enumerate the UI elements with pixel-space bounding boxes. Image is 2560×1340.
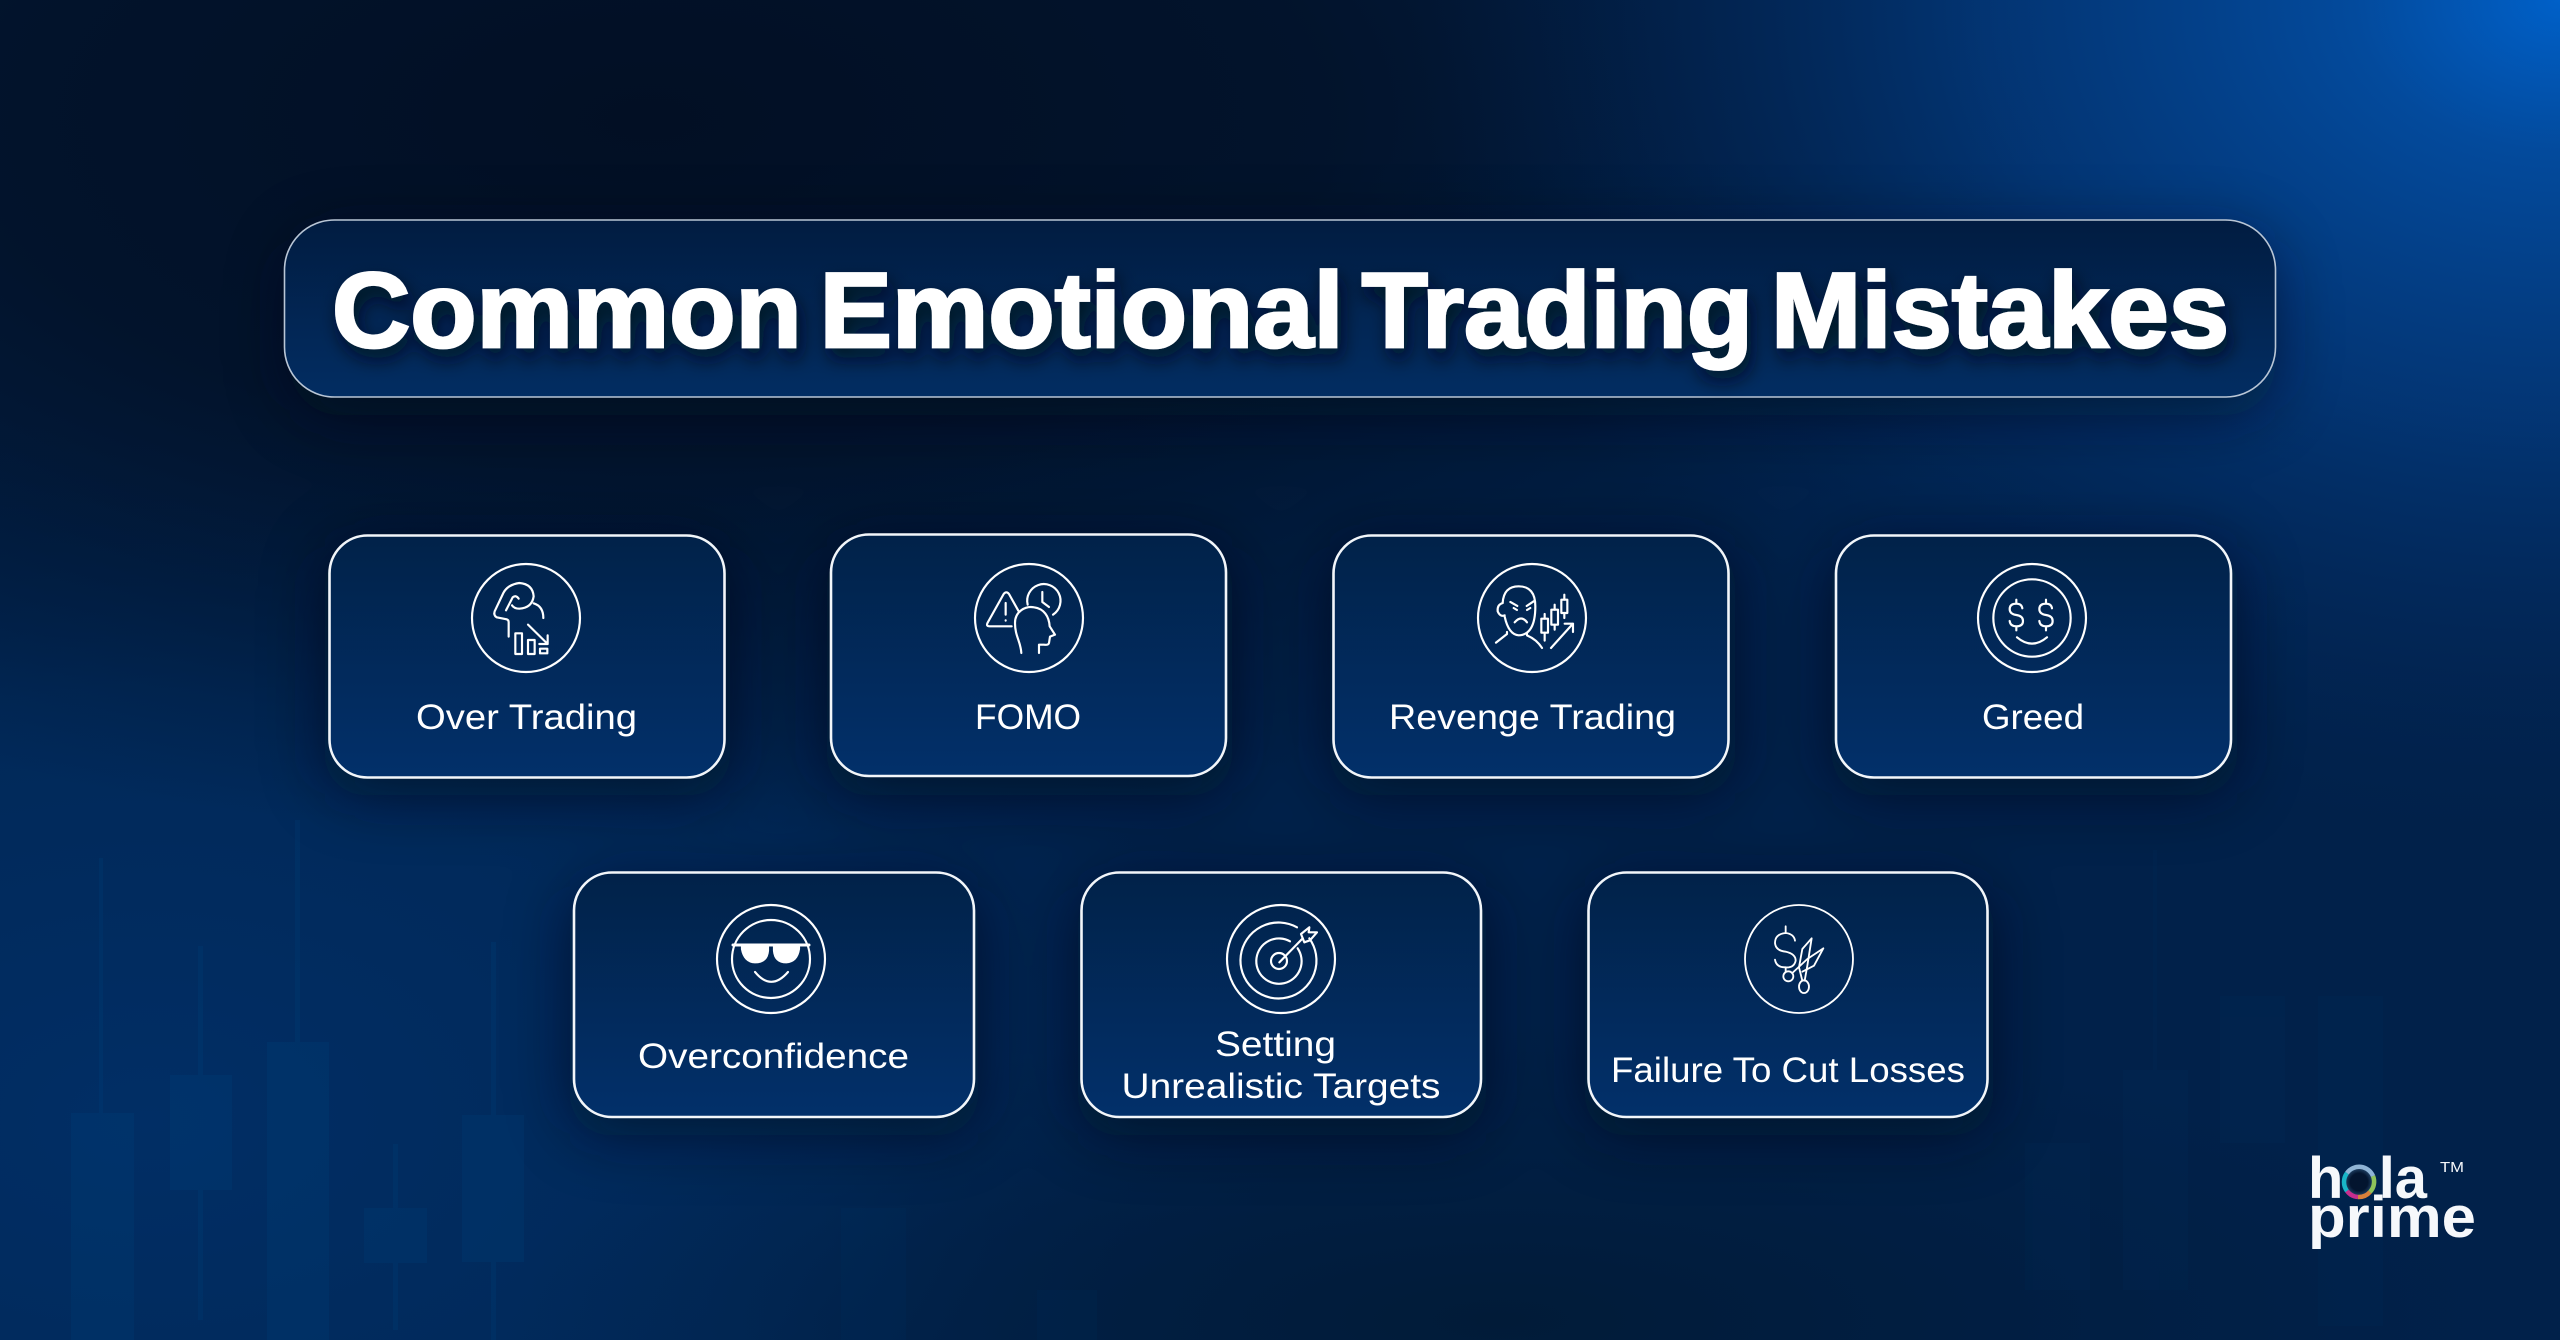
background candlesticks right	[2025, 850, 2383, 1326]
label: FOMO: FOMO	[975, 698, 1081, 737]
label: Overconfidence: Overconfidence	[638, 1037, 909, 1076]
label: Over Trading: Over Trading	[416, 698, 637, 737]
title panel	[284, 220, 2276, 397]
panel: Overconfidence	[574, 872, 974, 1117]
title: Common Emotional Trading Mistakes	[332, 250, 2229, 370]
label: Setting Unrealistic Targets: Setting	[1215, 1025, 1336, 1064]
label: Revenge Trading: Revenge Trading	[1389, 698, 1676, 737]
card shadows	[290, 235, 2275, 1135]
logo: hola prime	[2308, 1146, 2476, 1250]
icon: dollar-eyes smiley	[1978, 564, 2086, 672]
icon: warning, clock and head	[975, 564, 1083, 672]
panel: Greed	[1836, 536, 2231, 778]
panel: Setting Unrealistic Targets	[1082, 872, 1481, 1117]
label: Greed: Greed	[1982, 698, 2084, 737]
icon: person with falling bars	[472, 564, 580, 672]
label: Setting Unrealistic Targets: Unrealistic Targets	[1122, 1067, 1440, 1106]
panel: Revenge Trading	[1334, 536, 1728, 778]
panel: FOMO	[831, 534, 1226, 776]
icon: dollar and scissors	[1745, 905, 1853, 1013]
background candlesticks left	[71, 820, 1097, 1340]
trademark: TM	[2440, 1159, 2464, 1176]
label: Failure To Cut Losses: Failure To Cut Losses	[1611, 1051, 1965, 1090]
logo: hola prime: prime	[2308, 1185, 2476, 1250]
icon: angry face with candlesticks	[1478, 564, 1586, 672]
logo: hola prime: hola	[2308, 1146, 2428, 1211]
icon: target with arrow	[1227, 905, 1335, 1013]
logo bubble	[2343, 1166, 2375, 1198]
panel: Over Trading	[330, 536, 724, 778]
label: Setting Unrealistic Targets	[1122, 1025, 1440, 1106]
icon: sunglasses smiley	[717, 905, 825, 1013]
panel: Failure To Cut Losses	[1588, 872, 1988, 1117]
